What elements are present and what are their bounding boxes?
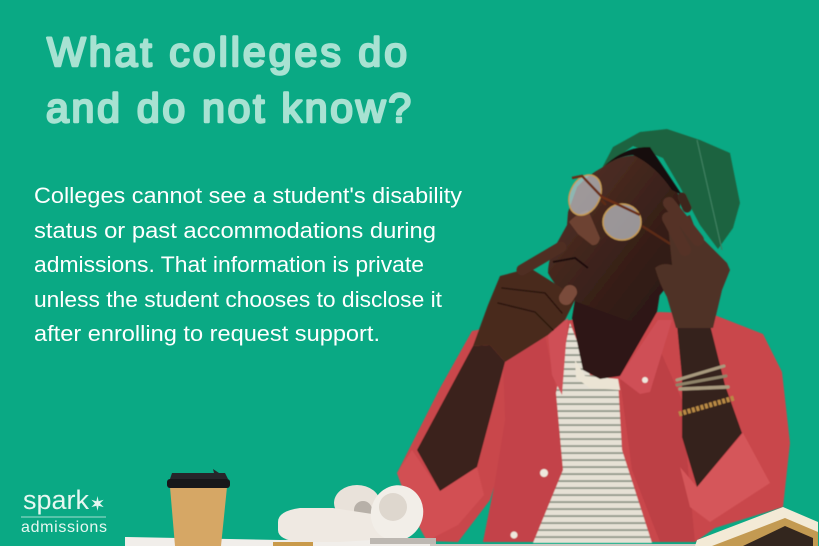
right arm <box>677 325 742 487</box>
icon: logo star <box>91 496 104 511</box>
icon: coffee cup <box>167 469 230 546</box>
nose and mouth <box>569 210 600 245</box>
logo: spark admissions <box>21 485 107 536</box>
face <box>548 155 680 325</box>
hat <box>602 129 740 250</box>
striped shirt <box>533 323 652 543</box>
headphones <box>273 478 436 546</box>
logo: spark admissions: spark <box>23 485 89 515</box>
title: and do not know? <box>46 85 411 131</box>
left arm <box>417 345 505 491</box>
body text: unless the student chooses to disclose it <box>34 287 442 312</box>
hair <box>603 147 682 195</box>
person <box>397 129 790 543</box>
jacket collar <box>548 318 568 395</box>
jacket left cuff <box>397 450 484 541</box>
bracelets <box>677 366 734 414</box>
neck <box>572 280 662 379</box>
body text: status or past accommodations during <box>34 218 436 243</box>
title <box>46 29 411 131</box>
open book <box>695 507 818 546</box>
desk surface <box>125 537 700 546</box>
hand at chin <box>473 247 575 362</box>
logo: spark admissions: admissions <box>21 519 107 536</box>
jacket <box>397 312 790 542</box>
body text: after enrolling to request support. <box>34 321 380 346</box>
glasses <box>563 170 672 245</box>
body text: Colleges cannot see a student's disability <box>34 183 462 208</box>
body text <box>34 183 462 346</box>
body text: admissions. That information is private <box>34 252 424 277</box>
hand at temple <box>655 197 730 328</box>
jacket right cuff <box>680 433 770 522</box>
title: What colleges do <box>47 29 407 75</box>
